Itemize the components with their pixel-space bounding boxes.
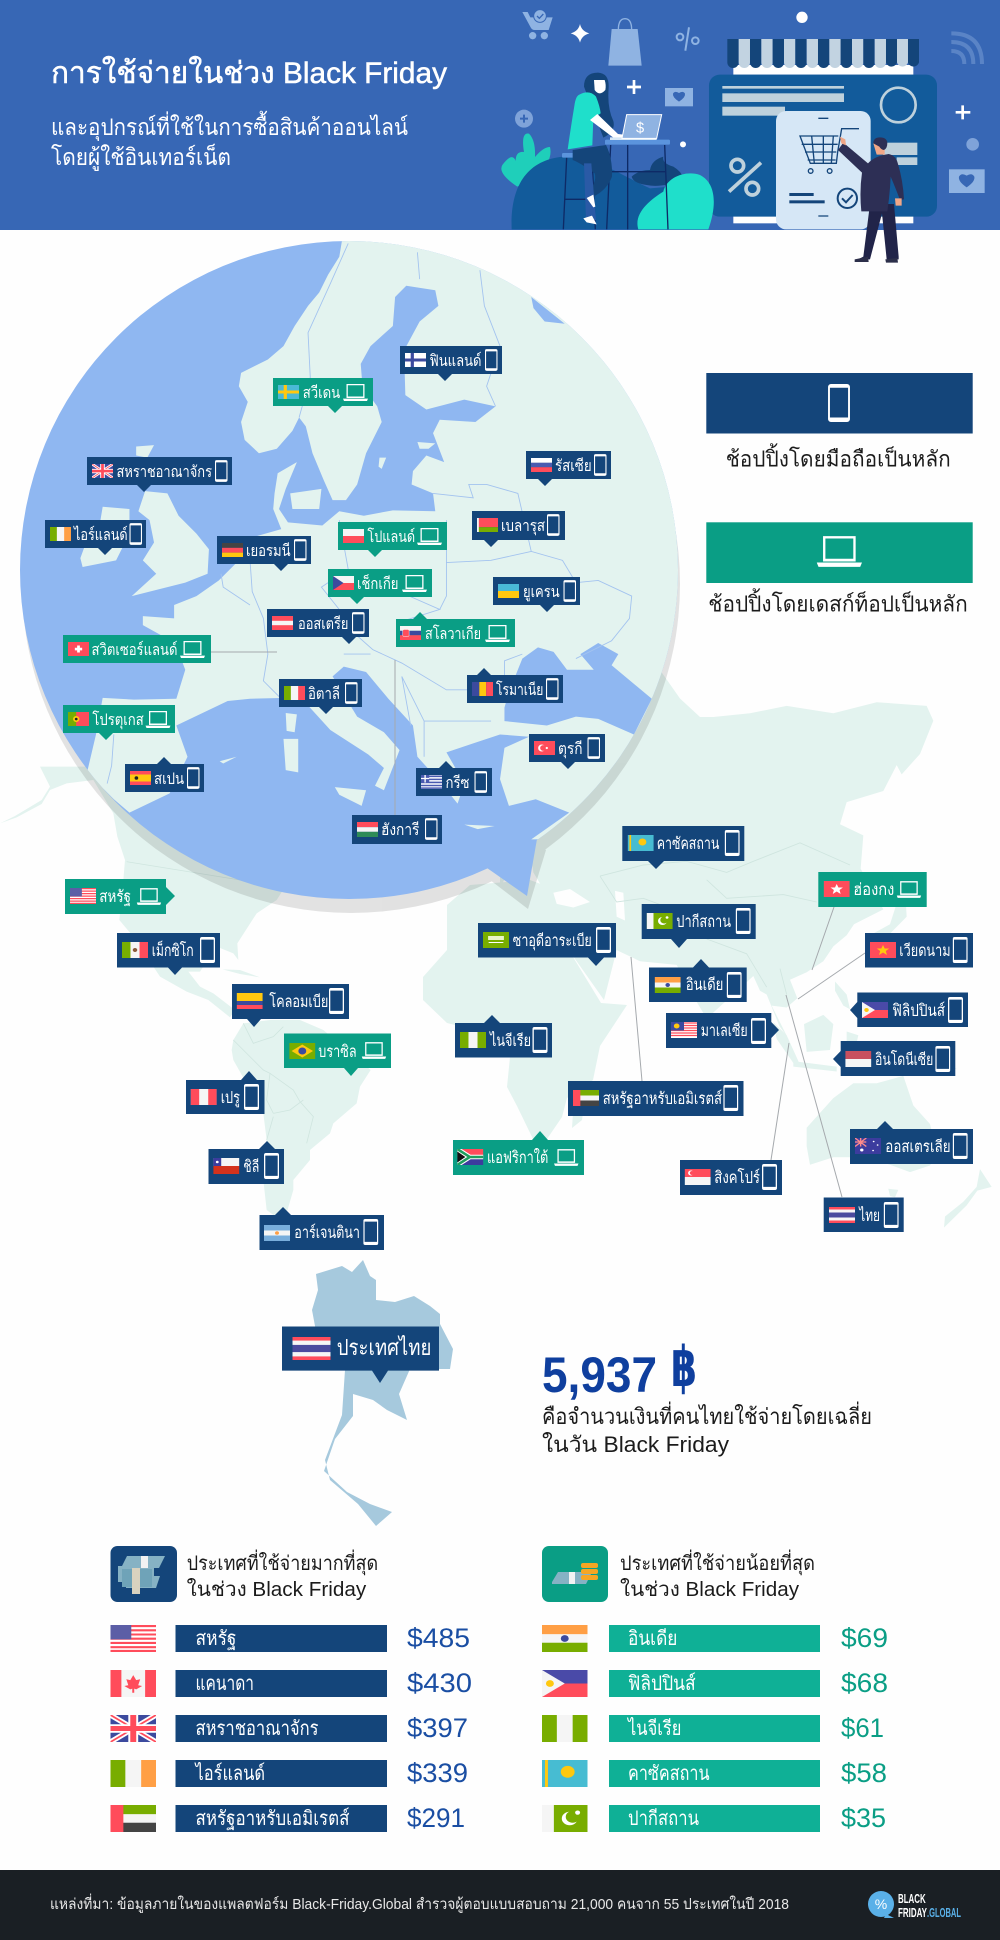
label: Chile: ชิลี — [243, 1158, 259, 1176]
row: USA: $485 — [407, 1623, 470, 1653]
row: USA — [110, 1623, 470, 1653]
label: Kazakhstan: คาซัคสถาน — [657, 835, 719, 853]
row: United Kingdom — [110, 1713, 468, 1743]
label: Russia — [526, 451, 611, 486]
legend: desktop — [706, 522, 973, 616]
label: Finland — [400, 346, 502, 381]
connector lines from labels to small countries — [211, 652, 865, 1197]
label: Nigeria: ไนจีเรีย — [488, 1031, 531, 1050]
label: Hong Kong: ฮ่องกง — [853, 881, 894, 899]
header title: การใช้จ่ายในช่วง Black Friday — [51, 56, 447, 90]
heading: top spenders: ประเทศที่ใช้จ่ายมากที่สุด — [187, 1549, 378, 1576]
logo: % — [875, 1896, 887, 1912]
stat: average Thai spend: ฿ — [671, 1335, 697, 1398]
panel: lowest spenders — [542, 1546, 888, 1833]
row: Ireland — [110, 1758, 468, 1788]
label: Slovakia: สโลวาเกีย — [425, 624, 481, 643]
label: Kazakhstan — [622, 826, 744, 869]
legend: mobile: ช้อปปิ้งโดยมือถือเป็นหลัก — [726, 444, 951, 472]
label: Peru — [186, 1071, 264, 1114]
label: Brazil — [284, 1034, 391, 1076]
label: Malaysia: มาเลเซีย — [701, 1022, 748, 1040]
land: Australia and New Zealand — [807, 1076, 992, 1228]
stat: average Thai spend — [542, 1335, 872, 1457]
label: Philippines — [850, 992, 968, 1027]
label: Indonesia — [833, 1041, 955, 1076]
row: Pakistan: ปากีสถาน — [628, 1808, 699, 1830]
stat: average Thai spend: คือจำนวนเงินที่คนไทยใช้จ่ายโดยเฉลี่ย — [542, 1401, 872, 1429]
label: Ireland — [45, 520, 146, 555]
label: India: อินเดีย — [686, 976, 723, 994]
header subtitle: และอุปกรณ์ที่ใช้ในการซื้อสินค้าออนไลน์ — [51, 111, 408, 141]
label: Hungary — [352, 815, 442, 844]
label: Australia: ออสเตรเลีย — [885, 1138, 951, 1156]
label: Poland: โปแลนด์ — [367, 527, 415, 546]
land: Japan, Philippines and Indonesia — [773, 887, 957, 1076]
label: Portugal — [63, 705, 175, 740]
label: Sweden — [273, 378, 373, 413]
header illustration: shop, shopper and decorations — [501, 10, 985, 263]
label: Turkey: ตุรกี — [558, 740, 582, 759]
label: Peru: เปรู — [221, 1089, 240, 1108]
row: India — [542, 1623, 888, 1653]
icon: heart boxes — [665, 88, 985, 193]
row: Philippines — [542, 1668, 888, 1698]
row: Nigeria — [542, 1713, 884, 1743]
label: India — [649, 959, 747, 1002]
phone screen with cart — [776, 111, 871, 229]
heading: top spenders: ในช่วง Black Friday — [187, 1578, 366, 1601]
icon: shopping bag — [608, 19, 642, 66]
row: Kazakhstan — [542, 1758, 887, 1788]
decorative dots and plus signs — [627, 12, 970, 147]
label: Belarus: เบลารุส — [501, 518, 545, 536]
map of Thailand — [312, 1260, 453, 1526]
label: UAE — [568, 1081, 744, 1116]
row: UAE: $291 — [407, 1803, 465, 1833]
label: Thailand (map): ไทย — [858, 1206, 880, 1225]
label: Philippines: ฟิลิปปินส์ — [892, 1001, 945, 1020]
source text: แหล่งที่มา: ข้อมูลภายในของแพลตฟอร์ม Black-Friday.Global สำรวจผู้ตอบแบบสอบถาม 21,000 คนจาก 55 ประเทศในปี 2018 — [50, 1893, 789, 1913]
label: Vietnam: เวียดนาม — [899, 942, 951, 960]
row: Nigeria: $61 — [841, 1713, 884, 1743]
row: United Kingdom: $397 — [407, 1713, 468, 1743]
legend: desktop: ช้อปปิ้งโดยเดสก์ท็อปเป็นหลัก — [708, 588, 968, 616]
label: Austria: ออสเตรีย — [298, 615, 348, 633]
man pointing at screen — [838, 137, 904, 263]
europe zoom circle — [20, 241, 678, 899]
label: Colombia: โคลอมเบีย — [269, 992, 328, 1011]
header banner — [0, 0, 1000, 230]
label: Nigeria — [455, 1015, 552, 1058]
land: Africa — [423, 880, 627, 1139]
icon: percent — [677, 27, 699, 51]
row: Pakistan: $35 — [841, 1803, 886, 1833]
label: Greece: กรีซ — [446, 774, 470, 792]
row: Nigeria: ไนจีเรีย — [626, 1717, 681, 1740]
row: Canada: $430 — [407, 1668, 472, 1698]
label: USA: สหรัฐ — [99, 888, 131, 906]
heading: top spenders — [187, 1549, 378, 1601]
land: British Isles — [80, 445, 209, 596]
row: Pakistan — [542, 1803, 886, 1833]
label: Australia — [850, 1121, 973, 1164]
row: United Kingdom: สหราชอาณาจักร — [196, 1718, 319, 1740]
logo: FRIDAY — [898, 1905, 927, 1920]
header subtitle — [51, 111, 408, 171]
label: Argentina: อาร์เจนตินา — [294, 1223, 360, 1242]
heading: lowest spenders — [620, 1549, 815, 1601]
label: Switzerland — [63, 635, 211, 663]
header subtitle: โดยผู้ใช้อินเทอร์เน็ต — [51, 142, 231, 171]
label: Belarus — [472, 511, 565, 547]
land: Eurasia — [500, 665, 992, 1228]
row: Kazakhstan: คาซัคสถาน — [628, 1763, 710, 1785]
label: Argentina — [260, 1207, 384, 1250]
label: Italy: อิตาลี — [308, 685, 340, 703]
heading: lowest spenders: ในช่วง Black Friday — [620, 1578, 799, 1601]
label: Italy — [279, 679, 362, 714]
water: Black Sea and north — [504, 297, 652, 734]
label: Germany — [217, 536, 311, 571]
land: South America — [232, 1020, 371, 1217]
label: Saudi Arabia: ซาอุดีอาระเบีย — [513, 932, 592, 951]
land: Mediterranean and Baltic islands — [220, 442, 495, 829]
row: Ireland: $339 — [407, 1758, 468, 1788]
logo: BLACK — [898, 1891, 926, 1906]
label: Switzerland: สวิตเซอร์แลนด์ — [92, 640, 178, 659]
stat: average Thai spend: ในวัน Black Friday — [542, 1432, 729, 1457]
label: Indonesia: อินโดนีเซีย — [875, 1050, 933, 1069]
shop awning — [727, 39, 919, 75]
label: Mexico — [117, 933, 220, 975]
icon: money and coins — [542, 1546, 608, 1602]
row: Philippines: ฟิลิปปินส์ — [628, 1672, 696, 1695]
icon: wifi — [951, 33, 982, 64]
label: Hungary: ฮังการี — [381, 821, 420, 839]
label: Thailand headline: ประเทศไทย — [337, 1335, 431, 1360]
globe drop shadow — [22, 255, 680, 913]
row: UAE: สหรัฐอาหรับเอมิเรตส์ — [196, 1807, 350, 1830]
row: Ireland: ไอร์แลนด์ — [194, 1762, 265, 1785]
label: Poland — [338, 522, 447, 557]
label: Vietnam — [865, 933, 973, 968]
label: USA — [65, 879, 175, 914]
label: Slovakia — [396, 612, 515, 647]
label: Greece — [416, 761, 492, 796]
label: Romania: โรมาเนีย — [496, 680, 543, 699]
label: United Kingdom — [87, 457, 232, 492]
left hill and plants — [501, 134, 714, 229]
label: Mexico: เม็กซิโก — [152, 940, 194, 960]
woman with laptop: $ — [636, 121, 644, 137]
icon: sparkle — [571, 24, 589, 43]
label: United Kingdom: สหราชอาณาจักร — [116, 464, 212, 481]
land: North America — [0, 767, 371, 1217]
row: Canada: แคนาดา — [196, 1673, 254, 1695]
row: Philippines: $68 — [841, 1668, 888, 1698]
label: Spain — [125, 757, 204, 792]
footer — [0, 1870, 1000, 1940]
label: Romania — [467, 668, 563, 703]
label: Colombia — [232, 984, 349, 1027]
label: Saudi Arabia — [478, 923, 616, 966]
stool and table — [562, 140, 670, 229]
row: India: อินเดีย — [628, 1628, 677, 1650]
woman with laptop — [568, 73, 662, 224]
row: India: $69 — [841, 1623, 888, 1653]
legend: mobile — [706, 373, 973, 472]
label: Spain: สเปน — [154, 771, 184, 788]
label: Russia: รัสเซีย — [555, 457, 592, 475]
label: Germany: เยอรมนี — [246, 542, 291, 560]
label: Brazil: บราซิล — [318, 1043, 357, 1061]
label: Czechia — [328, 569, 432, 604]
label: Czechia: เช็กเกีย — [357, 573, 398, 593]
row: USA: สหรัฐ — [196, 1628, 236, 1650]
label: South Africa — [453, 1131, 584, 1175]
label: Pakistan — [642, 904, 756, 948]
label: Singapore — [680, 1160, 782, 1195]
label: Finland: ฟินแลนด์ — [430, 351, 482, 370]
land: European mainland — [88, 241, 678, 840]
label: Sweden: สวีเดน — [303, 384, 340, 402]
panel: top spenders — [110, 1546, 472, 1833]
label: Ukraine — [493, 577, 580, 612]
world map — [0, 665, 992, 1228]
label: Thailand (map) — [824, 1198, 904, 1232]
logo — [868, 1891, 961, 1920]
label: South Africa: แอฟริกาใต้ — [487, 1148, 548, 1167]
label: Chile — [208, 1141, 284, 1184]
label: Ireland: ไอร์แลนด์ — [72, 525, 128, 544]
logo: .GLOBAL — [927, 1905, 961, 1920]
stat: average Thai spend: 5,937 — [542, 1347, 657, 1403]
label: Turkey — [529, 734, 605, 769]
label: Singapore: สิงคโปร์ — [714, 1168, 760, 1187]
row: Canada — [110, 1668, 472, 1698]
label: Malaysia — [666, 1013, 779, 1048]
label: Thailand headline — [282, 1326, 439, 1383]
heading: lowest spenders: ประเทศที่ใช้จ่ายน้อยที่สุด — [620, 1549, 815, 1576]
label: Hong Kong — [818, 872, 927, 907]
label: UAE: สหรัฐอาหรับเอมิเรตส์ — [603, 1089, 722, 1108]
icon: money stacks — [110, 1546, 177, 1602]
label: Ukraine: ยูเครน — [523, 584, 560, 602]
borders between European countries — [107, 243, 632, 784]
shop front — [709, 75, 937, 223]
row: UAE — [110, 1803, 465, 1833]
label: Austria — [267, 609, 369, 644]
label: Pakistan: ปากีสถาน — [676, 913, 731, 931]
row: Kazakhstan: $58 — [841, 1758, 887, 1788]
icon: shopping cart — [522, 10, 553, 39]
label: Portugal: โปรตุเกส — [92, 710, 144, 730]
